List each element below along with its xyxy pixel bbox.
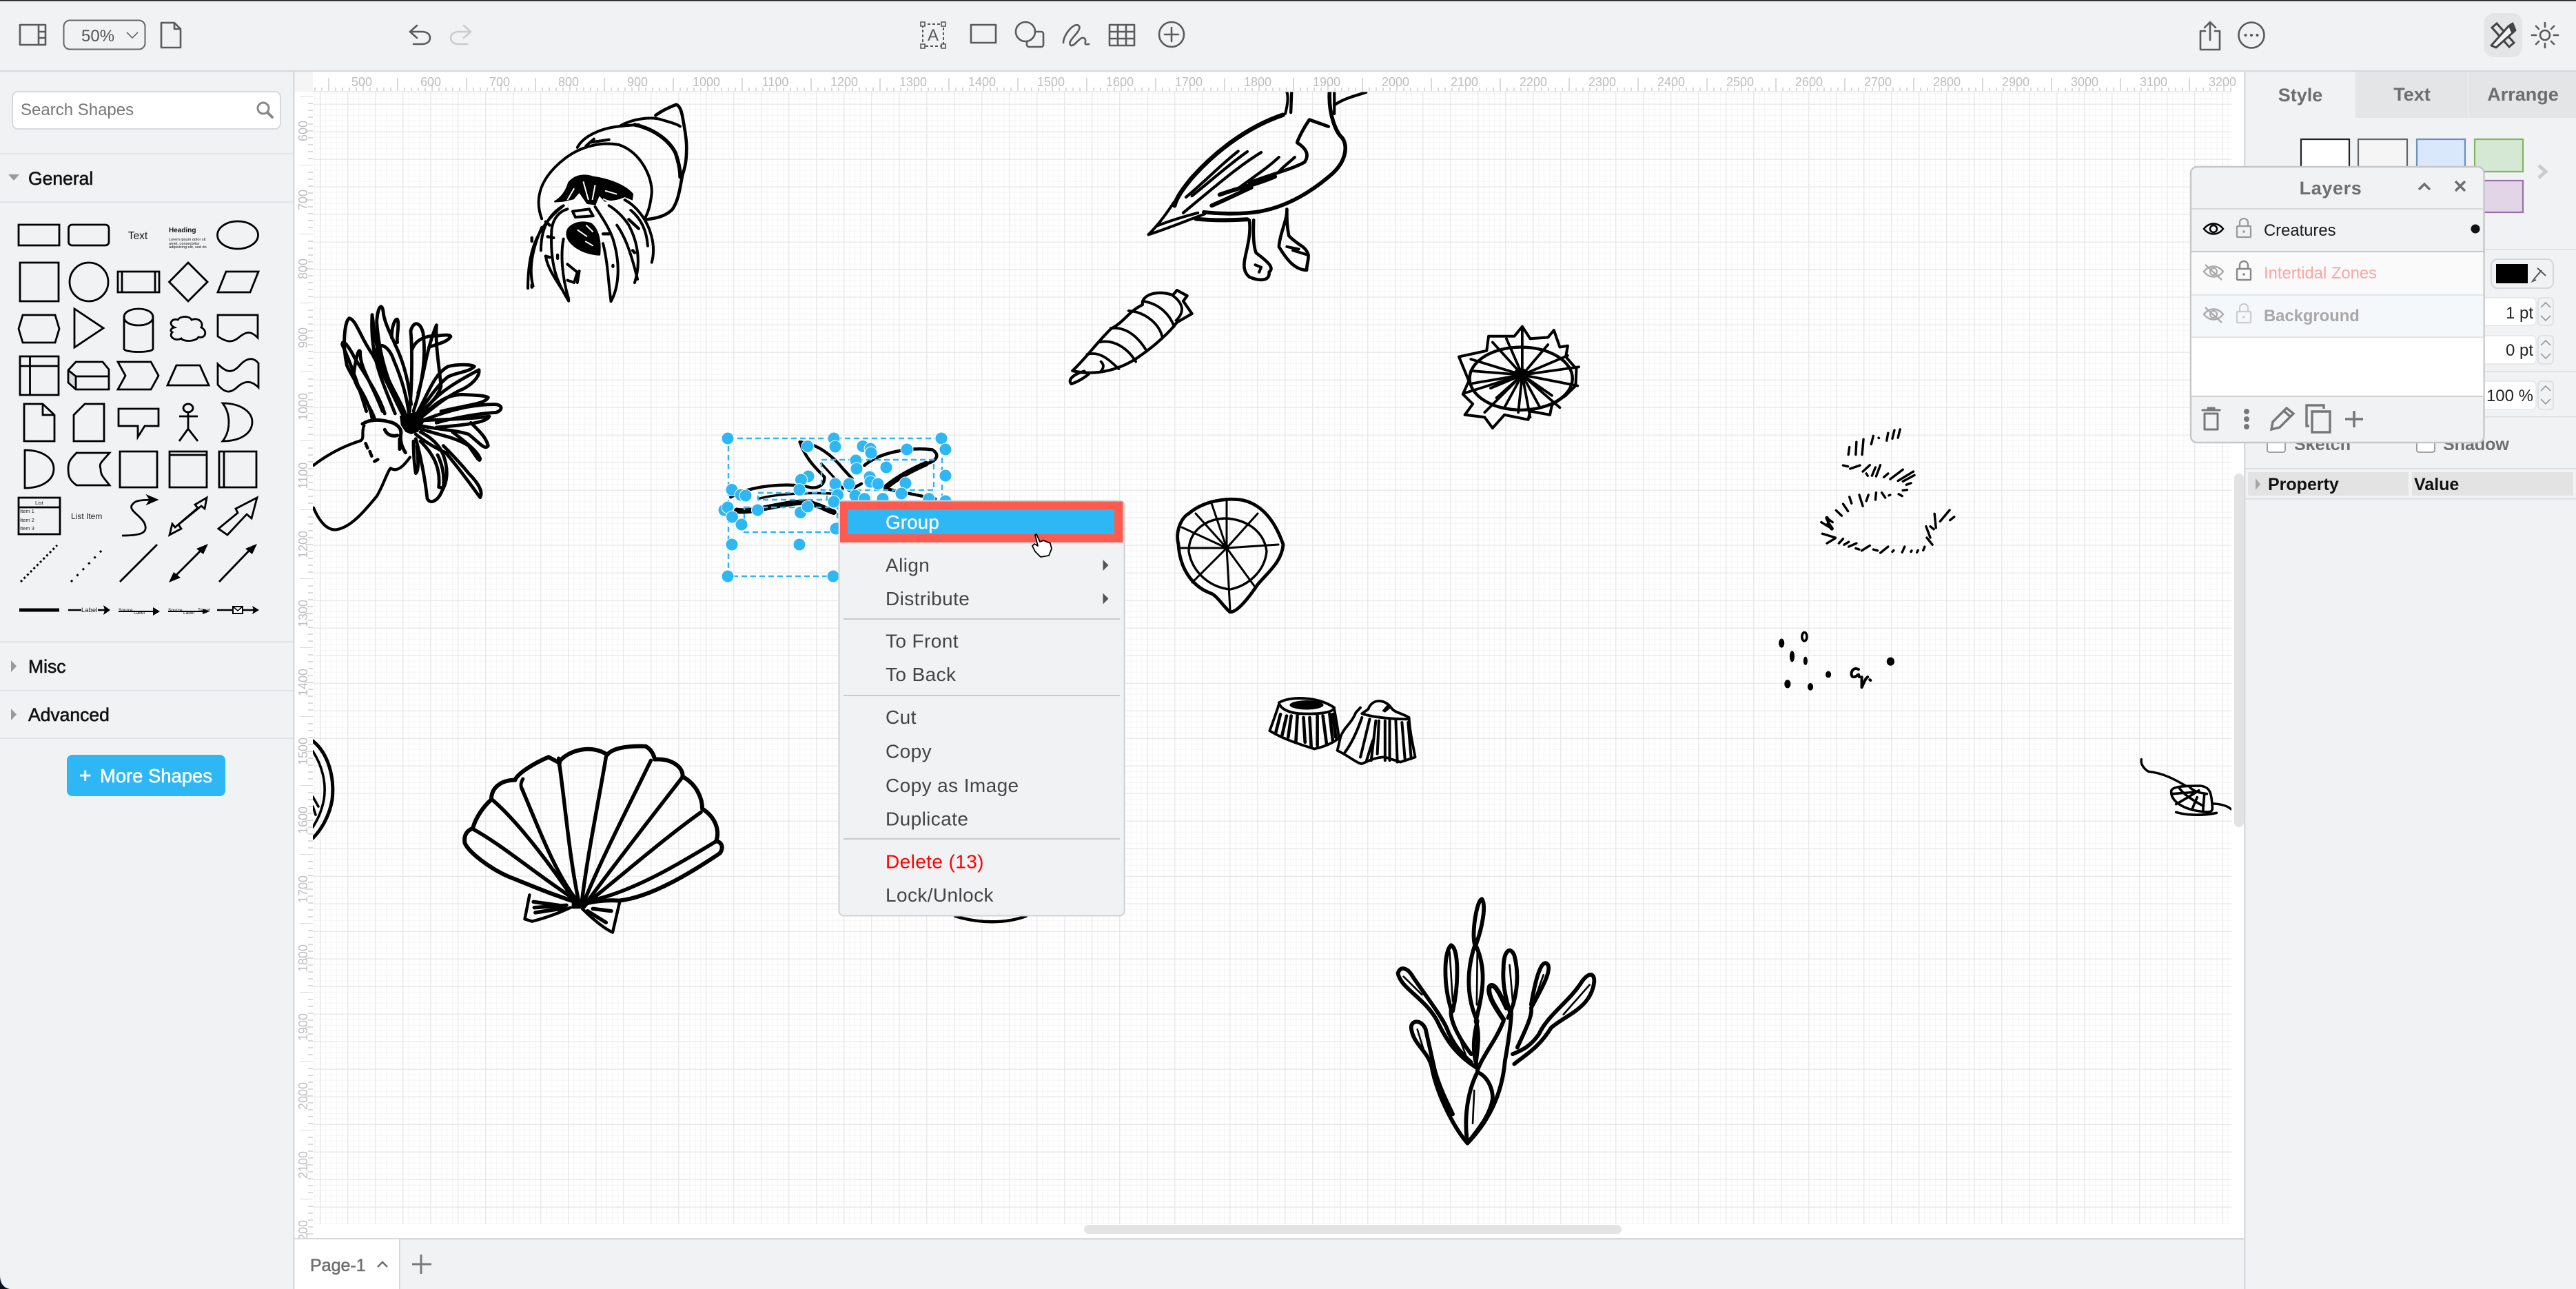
icon: shapes xyxy=(1016,22,1043,47)
sketch and shadow options: Shadow xyxy=(2443,435,2509,454)
icon: freehand xyxy=(1063,25,1089,45)
shape palette: Target xyxy=(198,608,210,613)
vertical ruler: 1300 xyxy=(296,600,310,627)
creature: scallop shell xyxy=(464,747,722,933)
icon: share xyxy=(2200,22,2220,50)
page tab caret xyxy=(378,1262,387,1267)
layer row: Background xyxy=(2191,296,2484,337)
horizontal ruler: 600 xyxy=(420,75,441,89)
vertical ruler: 600 xyxy=(296,121,310,141)
horizontal ruler: 1100 xyxy=(762,75,788,89)
search box xyxy=(12,92,280,129)
menu item: Lock/Unlock: Lock/Unlock xyxy=(886,884,994,906)
vertical ruler: 1200 xyxy=(296,531,310,558)
numeric fields: 0 pt xyxy=(2506,341,2533,360)
horizontal ruler: 3200 xyxy=(2209,75,2236,89)
shape palette: Label xyxy=(134,611,145,616)
numeric fields xyxy=(2467,298,2553,409)
icon: insert text: A xyxy=(928,26,939,45)
shape palette: Source xyxy=(119,608,133,613)
add page button xyxy=(412,1255,431,1274)
horizontal ruler: 2000 xyxy=(1382,75,1409,89)
layer row: Intertidal Zones xyxy=(2191,252,2484,294)
sketch and shadow options xyxy=(2267,434,2509,454)
tabs: Text xyxy=(2393,84,2431,105)
menu item: Cut: Cut xyxy=(886,707,917,728)
creature: sea worm (selected) xyxy=(730,442,937,512)
shape palette: Lorem ipsum dolor sit xyxy=(169,238,206,242)
highlighted Group item: Group xyxy=(886,511,939,533)
icon: rectangle xyxy=(971,25,996,43)
horizontal ruler: 500 xyxy=(351,75,372,89)
canvas area xyxy=(294,92,2244,1239)
creature drawings on canvas xyxy=(313,92,2231,1143)
menu item: Copy as Image: Copy as Image xyxy=(886,775,1019,796)
creature: seaweed xyxy=(1398,899,1594,1143)
horizontal ruler: 2500 xyxy=(1726,75,1754,89)
creature: scattered dots xyxy=(1779,633,1894,691)
tabs xyxy=(2278,71,2576,118)
vertical ruler: 1400 xyxy=(296,669,310,696)
numeric fields: 100 % xyxy=(2486,387,2533,405)
icon: format panel active xyxy=(2484,13,2522,57)
shape palette: amet, consectetur xyxy=(169,242,200,246)
horizontal ruler: 1400 xyxy=(968,75,996,89)
shape palette: List xyxy=(35,500,44,506)
horizontal ruler: 1300 xyxy=(899,75,927,89)
shape palette: Item 1 xyxy=(20,508,34,514)
shape palette: List Item xyxy=(71,511,102,521)
creature: hidden arc below menu xyxy=(955,916,1026,922)
creature: small snail xyxy=(2141,760,2231,815)
vertical ruler: 1000 xyxy=(296,393,310,420)
creature: limpet side view xyxy=(1178,499,1283,612)
vertical ruler: 2100 xyxy=(296,1151,310,1179)
property table header xyxy=(2248,472,2573,496)
shape palette: Text xyxy=(128,230,148,242)
context menu xyxy=(839,500,1125,915)
shape palette: adipisicing elit, sed do xyxy=(169,245,207,250)
sketch and shadow options: Sketch xyxy=(2294,435,2351,454)
layer row: Intertidal Zones: Intertidal Zones xyxy=(2264,264,2377,283)
horizontal ruler: 2300 xyxy=(1588,75,1616,89)
horizontal ruler: 2600 xyxy=(1795,75,1823,89)
layers panel xyxy=(2191,167,2484,443)
horizontal ruler: 1500 xyxy=(1037,75,1065,89)
horizontal ruler: 1200 xyxy=(830,75,858,89)
menu item: Copy: Copy xyxy=(886,741,932,762)
menu item: Duplicate: Duplicate xyxy=(886,808,968,830)
layers toolbar icons xyxy=(2202,405,2363,432)
menu item: To Back: To Back xyxy=(886,664,957,685)
vertical ruler: 1500 xyxy=(296,738,310,765)
top toolbar xyxy=(0,0,2576,72)
vertical ruler: 1700 xyxy=(296,875,310,903)
shape palette xyxy=(19,221,259,616)
icon: theme sun xyxy=(2532,23,2558,48)
horizontal ruler: 3000 xyxy=(2071,75,2098,89)
icon: undo xyxy=(410,26,430,44)
creature: turret shell xyxy=(1070,290,1192,384)
icon: table xyxy=(1110,25,1134,45)
horizontal ruler: 700 xyxy=(489,75,510,89)
colour swatches xyxy=(2301,139,2523,212)
vertical ruler: 2000 xyxy=(296,1082,310,1110)
menu item: To Front: To Front xyxy=(886,631,959,652)
button: more shapes: More Shapes xyxy=(100,765,212,786)
horizontal ruler: 2400 xyxy=(1657,75,1685,89)
swatch next arrow xyxy=(2539,165,2546,178)
shape palette: Label xyxy=(183,611,194,616)
icon: sidebar toggle xyxy=(20,25,45,45)
horizontal ruler: 2800 xyxy=(1933,75,1961,89)
section: Misc: Misc xyxy=(28,656,65,677)
shape palette: Label xyxy=(81,607,97,614)
layer row: Background: Background xyxy=(2264,307,2360,325)
vertical ruler: 1600 xyxy=(296,806,310,834)
horizontal ruler: 1600 xyxy=(1106,75,1134,89)
shape palette: Item 2 xyxy=(20,517,34,523)
shape palette: Heading xyxy=(169,227,196,234)
vertical ruler: 900 xyxy=(296,327,310,348)
menu item: Distribute: Distribute xyxy=(886,588,970,609)
icon: insert text xyxy=(921,22,945,48)
section: Advanced: Advanced xyxy=(28,704,110,725)
layers header xyxy=(2300,178,2465,199)
icon: insert plus xyxy=(1159,22,1184,47)
horizontal ruler xyxy=(313,71,2245,92)
property table header: Property xyxy=(2268,475,2339,494)
creature: crescent at canvas edge xyxy=(313,741,333,838)
button: more shapes xyxy=(67,755,225,796)
horizontal ruler: 1000 xyxy=(693,75,720,89)
button: more shapes: + xyxy=(79,764,92,787)
horizontal ruler: 3100 xyxy=(2140,75,2167,89)
horizontal ruler: 2700 xyxy=(1864,75,1892,89)
vertical ruler xyxy=(293,72,313,1248)
menu item: Delete: Delete (13) xyxy=(886,851,984,873)
menu item: Align: Align xyxy=(886,555,930,576)
creature: limpet top view xyxy=(1459,327,1579,428)
vertical ruler: 700 xyxy=(296,190,310,210)
horizontal ruler: 2100 xyxy=(1451,75,1478,89)
layer row: Creatures xyxy=(2204,219,2480,240)
horizontal ruler: 1700 xyxy=(1175,75,1203,89)
icon: more options xyxy=(2238,22,2265,48)
scrollbars xyxy=(1084,474,2244,1234)
creature: dashed bryozoan strokes xyxy=(1821,429,1954,553)
horizontal ruler: 900 xyxy=(627,75,648,89)
layer row: Creatures: Creatures xyxy=(2264,221,2336,240)
menu item: Distribute xyxy=(886,588,1108,609)
horizontal ruler: 2900 xyxy=(2002,75,2030,89)
creature: barnacles xyxy=(1269,698,1415,764)
creature: hermit crab xyxy=(528,105,686,301)
shape palette: Source xyxy=(168,608,183,613)
line colour chip xyxy=(2491,259,2553,288)
property table header: Value xyxy=(2414,475,2459,494)
icon: redo xyxy=(451,26,471,44)
horizontal ruler: 2200 xyxy=(1520,75,1547,89)
section: Misc xyxy=(11,656,65,677)
highlighted Group item xyxy=(840,502,1123,542)
vertical ruler: 800 xyxy=(296,258,310,279)
right format panel xyxy=(2244,71,2576,1289)
zoom selector xyxy=(63,21,145,50)
horizontal ruler: 800 xyxy=(558,75,579,89)
selection bounding box and handles xyxy=(718,432,952,582)
zoom selector: 50% xyxy=(81,27,114,45)
creature: seagull xyxy=(1148,92,1366,280)
left shapes sidebar xyxy=(0,71,294,1289)
vertical ruler: 1800 xyxy=(296,944,310,972)
tabs: Style xyxy=(2278,85,2322,105)
window corner xyxy=(0,1275,10,1289)
section: General: General xyxy=(28,168,93,189)
tabs: Arrange xyxy=(2487,84,2559,105)
bottom page bar xyxy=(293,1238,2576,1289)
vertical ruler: 1900 xyxy=(296,1013,310,1041)
page tab label: Page-1 xyxy=(310,1256,366,1275)
horizontal ruler: 1800 xyxy=(1244,75,1271,89)
vertical ruler: 2200 xyxy=(296,1220,310,1248)
vertical ruler: 1100 xyxy=(296,463,310,489)
icon: hand cursor xyxy=(1032,534,1052,557)
numeric fields: 1 pt xyxy=(2506,304,2533,323)
horizontal ruler: 1900 xyxy=(1313,75,1340,89)
search box: Search Shapes xyxy=(21,101,134,119)
creature: sea anemone xyxy=(314,307,501,529)
shape palette: Item 3 xyxy=(20,525,34,531)
icon: page xyxy=(161,23,181,48)
menu item: Align xyxy=(886,555,1108,576)
layers header: Layers xyxy=(2300,178,2362,199)
